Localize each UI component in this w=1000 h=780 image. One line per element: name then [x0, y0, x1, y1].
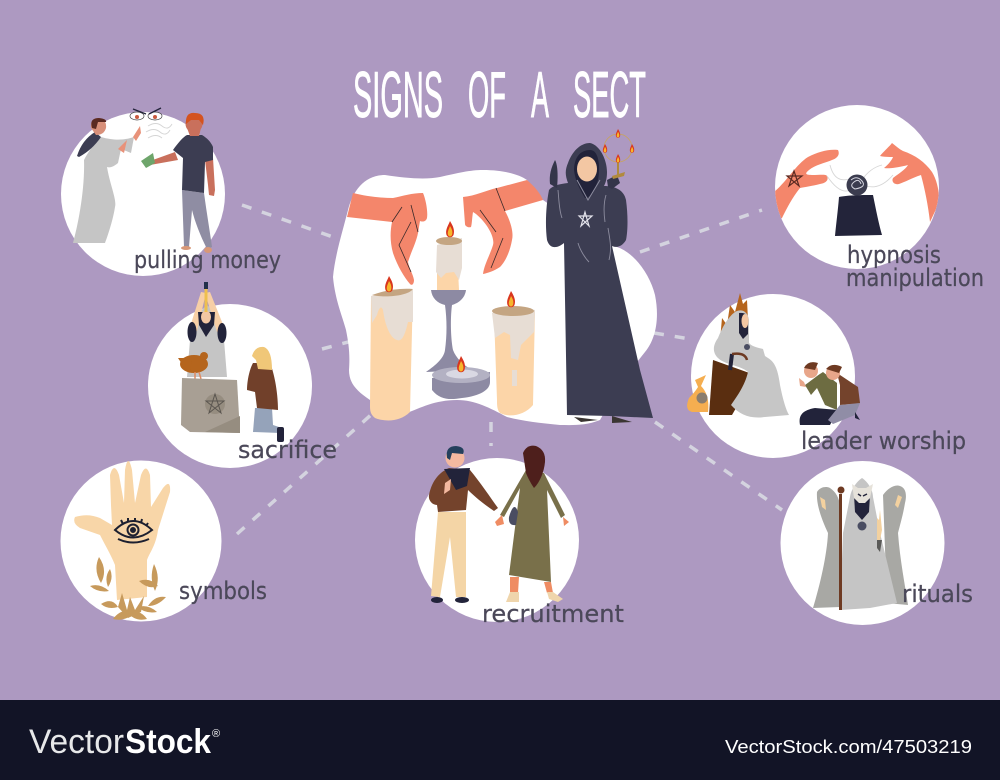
label: recruitment: recruitment [482, 600, 624, 628]
icon: right candle [492, 291, 535, 415]
icon: seated leader on throne [709, 293, 789, 418]
icon: man handing money [141, 113, 215, 253]
icon: cult member in grey robe [73, 118, 141, 243]
label: symbols: symbols [179, 577, 267, 605]
icon: side hooded figures [813, 485, 908, 608]
label: sacrifice: sacrifice [238, 436, 337, 464]
icon: wooden staff [838, 486, 844, 610]
icon: hypnotized person [835, 174, 882, 236]
VectorStock logo: ® [212, 728, 220, 740]
label: rituals: rituals [902, 580, 973, 608]
icon: marionette threads [827, 165, 893, 191]
panel: rituals [780, 461, 973, 625]
title [353, 58, 646, 131]
panel: recruitment [415, 446, 624, 628]
footer watermark bar [0, 700, 1000, 780]
panel: pulling money [61, 108, 281, 276]
icon: chicken [178, 352, 208, 379]
panel: sacrifice [148, 282, 337, 468]
icon: laurel branches [90, 557, 166, 620]
icon: puppeteer hands [770, 143, 939, 225]
icon: evil eyes [130, 108, 172, 138]
title: SIGNS [353, 58, 443, 131]
panel: central candle scene [333, 129, 657, 425]
icon: man with book [429, 446, 498, 603]
icon: tea light [432, 356, 490, 399]
icon: stone altar [181, 378, 240, 433]
icon: open palm [74, 461, 170, 600]
icon: robed figure with dagger [187, 282, 227, 377]
image number: VectorStock.com/47503219 [725, 736, 972, 757]
label: hypnosis manipulation [846, 241, 984, 292]
icon: all-seeing eye [115, 518, 152, 542]
icon: left hand [347, 193, 427, 285]
panel: leader worship [687, 293, 966, 458]
icon: hooded leader with candle [546, 129, 653, 423]
panel: symbols [60, 460, 267, 622]
icon: candlestick with candle [426, 221, 472, 372]
title: OF [468, 58, 506, 131]
label: hypnosis manipulation: manipulation [846, 264, 984, 292]
label: pulling money: pulling money [134, 246, 281, 274]
icon: kneeling woman [247, 347, 284, 442]
VectorStock logo: Stock [125, 723, 211, 761]
label: hypnosis manipulation: hypnosis [847, 241, 941, 269]
icon: woman in olive dress [495, 446, 569, 602]
label: leader worship: leader worship [801, 427, 966, 455]
icon: money bag [687, 375, 708, 412]
infographic canvas: SECT [573, 58, 646, 131]
icon: left candle [370, 276, 413, 420]
white blob backdrop [333, 170, 657, 425]
VectorStock logo: Vector [29, 723, 124, 761]
icon: right hand [463, 180, 543, 274]
VectorStock logo [29, 723, 220, 761]
icon: kneeling worshippers [799, 362, 860, 425]
icon: pentagram on hand [787, 171, 802, 186]
panel: hypnosis manipulation [770, 105, 984, 292]
title: A [531, 58, 549, 131]
icon: central masked figure [840, 478, 897, 610]
